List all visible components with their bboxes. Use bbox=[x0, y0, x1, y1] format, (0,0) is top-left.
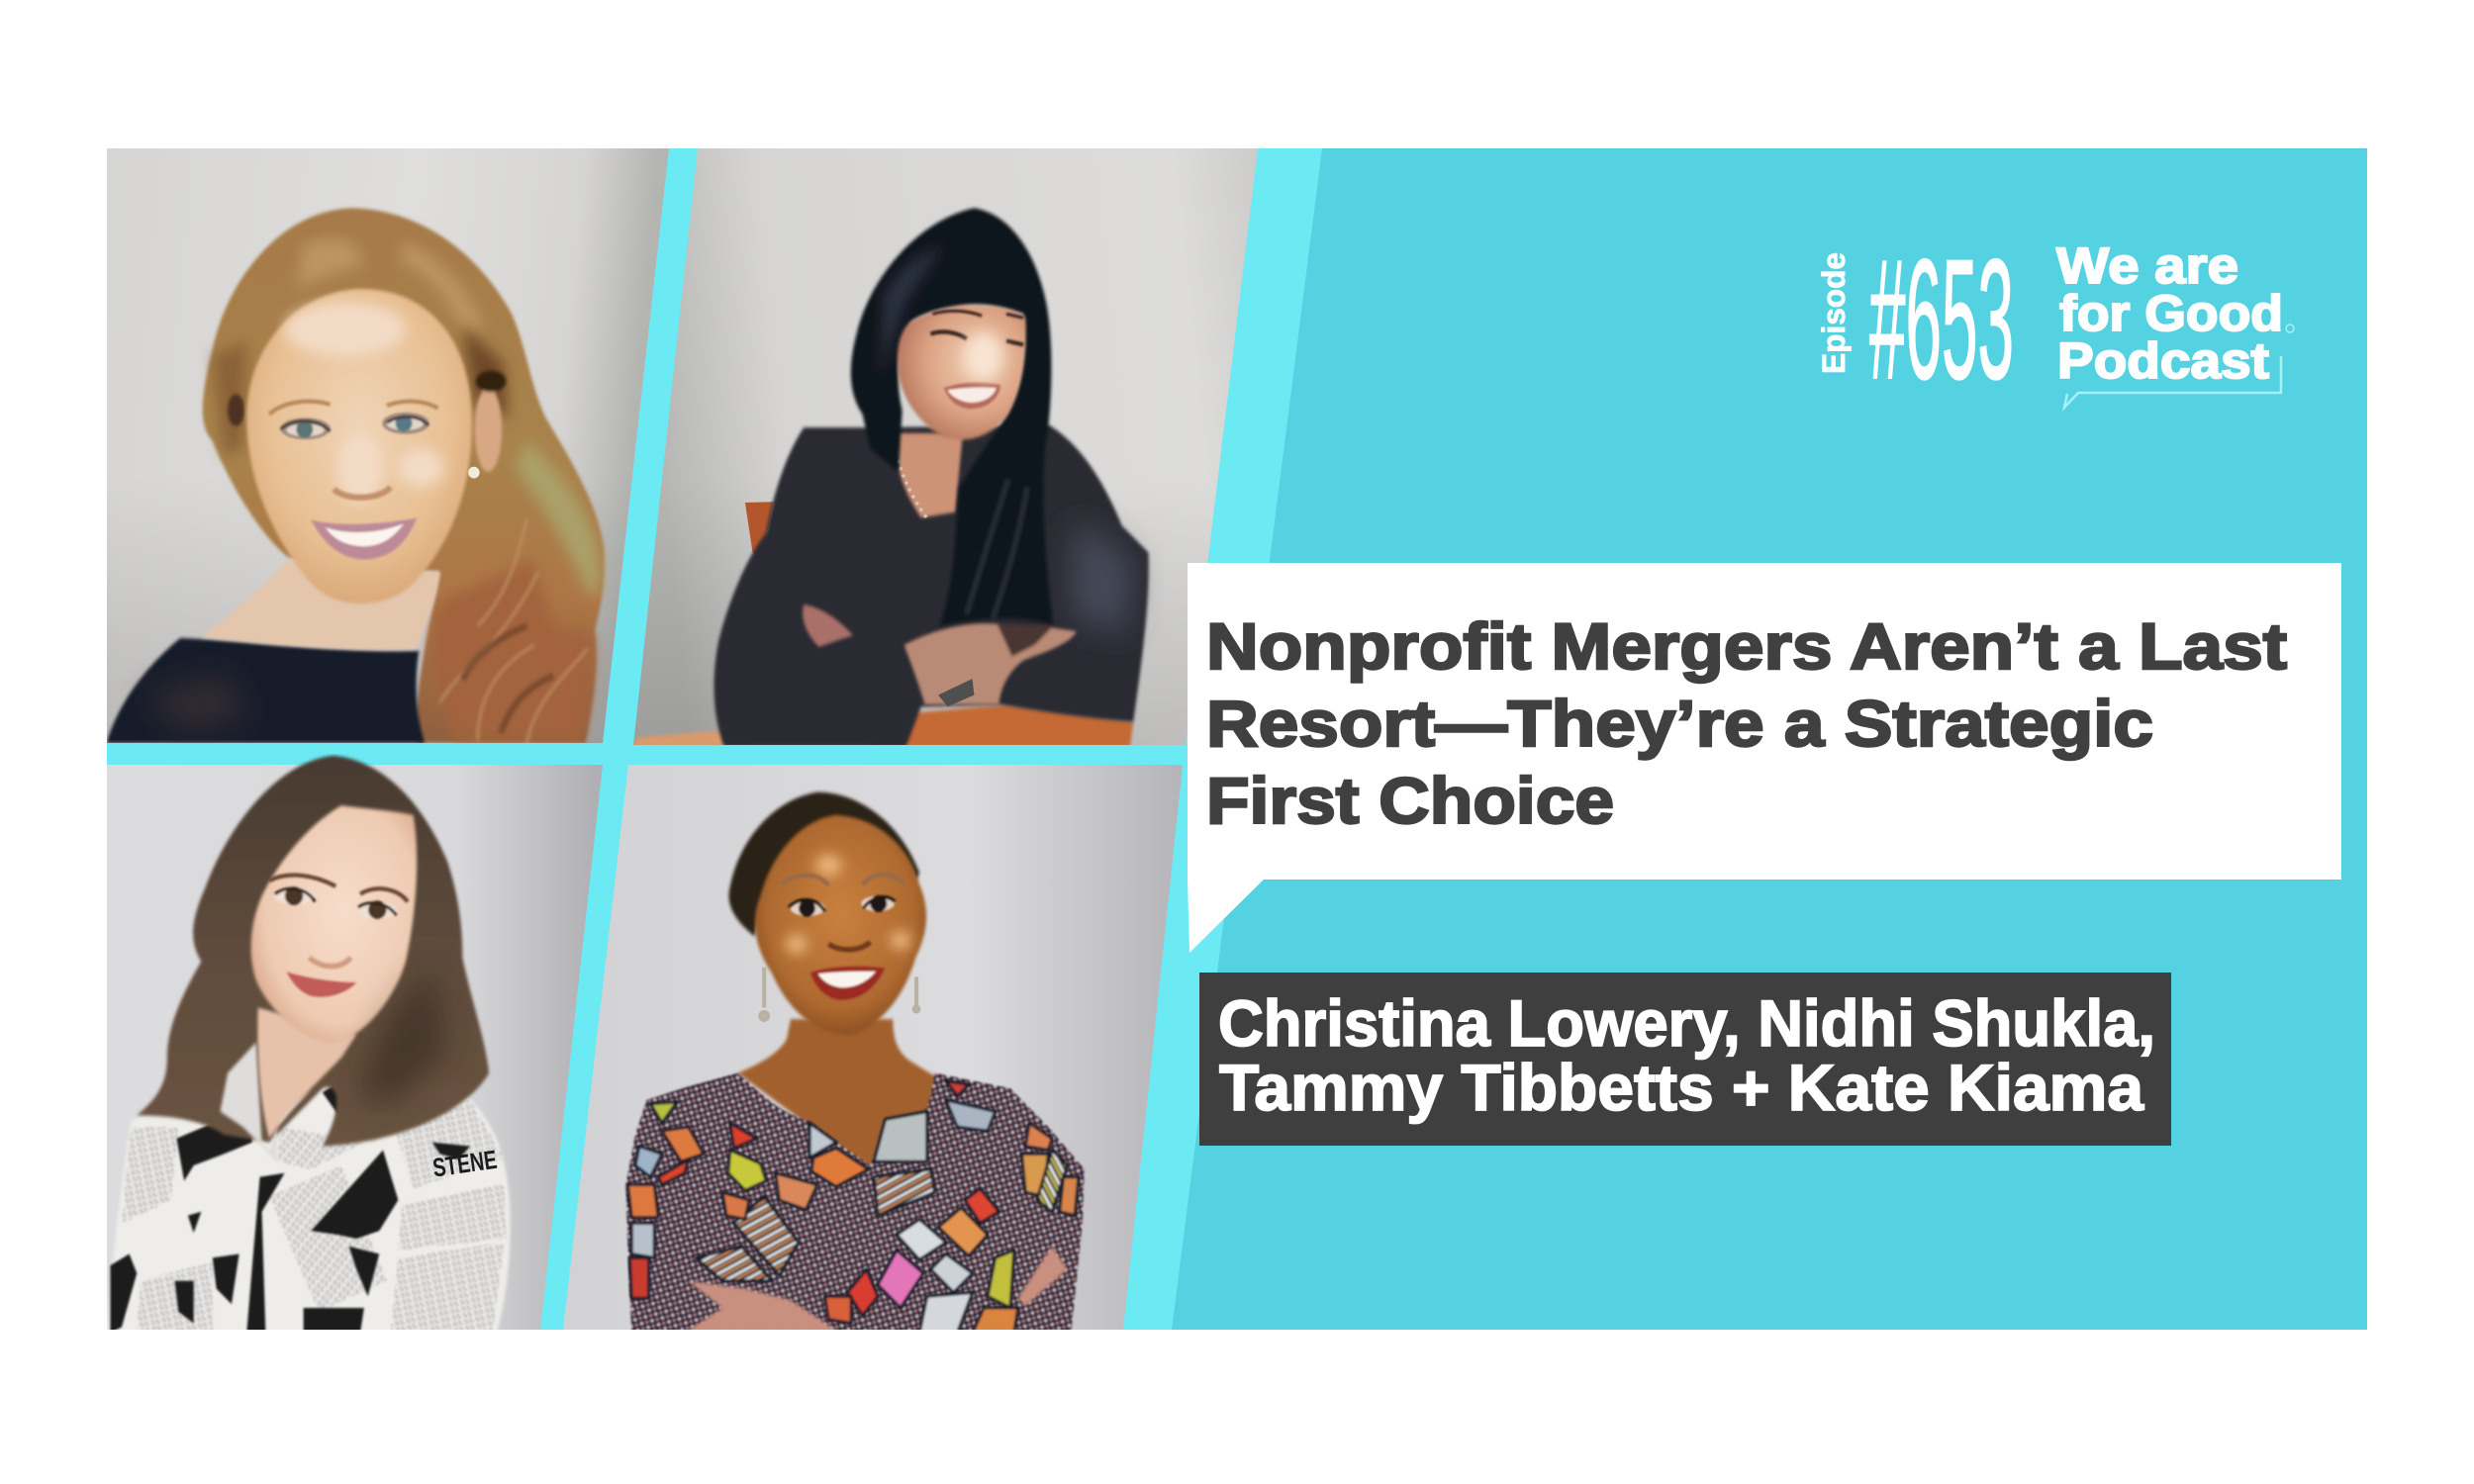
title text: Nonprofit Mergers Aren’t a Last bbox=[1206, 609, 2287, 683]
photo: Kate Kiama bbox=[559, 765, 1188, 1333]
photo: Christina Lowery bbox=[107, 148, 671, 744]
facial features bbox=[269, 402, 438, 560]
body bbox=[714, 425, 1149, 747]
blouse bbox=[107, 1086, 512, 1330]
podcast name bbox=[2056, 237, 2283, 389]
face bbox=[898, 306, 1026, 439]
photo: Tammy Tibbetts bbox=[107, 752, 607, 1333]
newspaper print bbox=[122, 1100, 507, 1330]
black print patches bbox=[110, 1066, 470, 1333]
podcast name: for Good bbox=[2059, 285, 2283, 341]
earring bbox=[468, 467, 480, 478]
guest names: Christina Lowery, Nidhi Shukla, bbox=[1218, 986, 2155, 1060]
earrings bbox=[760, 968, 918, 1020]
neck and chest bbox=[201, 560, 439, 650]
arms and hands bbox=[803, 604, 1077, 704]
dark box bbox=[1199, 973, 2171, 1146]
podcast logo: #653 bbox=[1869, 225, 2014, 415]
dress bbox=[107, 638, 425, 743]
watch bbox=[938, 679, 974, 706]
facial features bbox=[930, 311, 1023, 409]
face bbox=[251, 805, 417, 1043]
facial features bbox=[781, 875, 904, 1000]
hair bbox=[729, 792, 919, 936]
light cyan grid and diagonal band bbox=[107, 148, 1322, 1330]
title text: First Choice bbox=[1206, 764, 1614, 837]
hair bbox=[203, 208, 605, 743]
guest names box bbox=[1199, 973, 2171, 1146]
sleeve highlight bbox=[1073, 525, 1133, 633]
dress bbox=[626, 1073, 1085, 1333]
title speech bubble bbox=[1188, 563, 2341, 953]
bubble shape bbox=[1188, 563, 2341, 953]
hair bbox=[851, 208, 1053, 625]
newspaper headline: STENE bbox=[430, 1145, 499, 1183]
skin highlights bbox=[786, 855, 910, 954]
title text: Resort—They’re a Strategic bbox=[1206, 687, 2153, 760]
guest names bbox=[1218, 986, 2155, 1124]
hair bbox=[137, 756, 489, 1147]
nose highlight bbox=[965, 332, 1002, 380]
skin highlights bbox=[285, 303, 443, 503]
neck bbox=[257, 1007, 356, 1139]
collar bbox=[220, 1042, 311, 1161]
speech outline bbox=[2064, 356, 2281, 408]
photo: Nidhi Shukla bbox=[633, 148, 1267, 747]
chair bbox=[745, 502, 774, 556]
neck bbox=[895, 433, 963, 518]
title text bbox=[1206, 609, 2287, 837]
necklace bbox=[897, 453, 928, 518]
registered mark bbox=[2286, 325, 2294, 332]
podcast name: Podcast bbox=[2057, 332, 2269, 389]
table bbox=[868, 704, 1133, 747]
teal panel bbox=[107, 148, 2367, 1330]
dress pattern patches bbox=[627, 1080, 1079, 1333]
hair shadow bbox=[356, 966, 447, 1104]
episode artwork bbox=[107, 148, 2367, 1330]
episode label: Episode bbox=[1816, 252, 1852, 374]
face bbox=[755, 815, 926, 1035]
orange strip bbox=[633, 730, 726, 747]
guest names: Tammy Tibbetts + Kate Kiama bbox=[1219, 1051, 2144, 1124]
neck and chest bbox=[737, 1019, 938, 1169]
face bbox=[228, 289, 506, 603]
facial features bbox=[269, 876, 408, 997]
arms and hands bbox=[685, 1247, 1067, 1333]
podcast name: We are bbox=[2056, 237, 2238, 294]
